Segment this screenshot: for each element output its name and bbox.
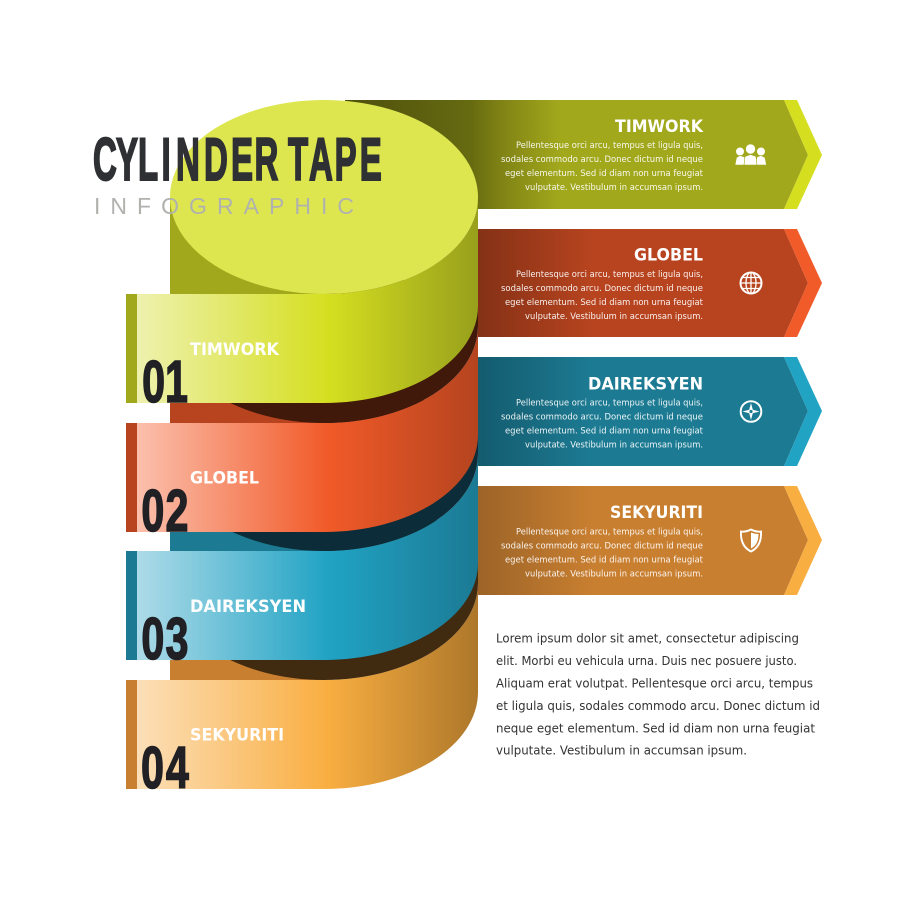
- text block: description: et ligula quis, sodales commodo arcu. Donec dictum id: [496, 699, 820, 713]
- icon: shield: [741, 530, 761, 552]
- panel: arrow 3 daireksyen: eget elementum. Sed id diam non urna feugiat: [505, 427, 704, 437]
- panel: arrow 4 sekyuriti: sodales commodo arcu. Donec dictum id neque: [501, 541, 703, 551]
- text block: description: Lorem ipsum dolor sit amet, consectetur adipiscing: [496, 632, 799, 646]
- panel: arrow 4 sekyuriti: [478, 486, 822, 595]
- band label: globel: GLOBEL: [190, 468, 259, 488]
- shadow under band 1: [170, 280, 478, 423]
- panel: arrow 2 globel: eget elementum. Sed id diam non urna feugiat: [505, 298, 704, 308]
- panel: arrow 3 daireksyen: DAIREKSYEN: [588, 374, 703, 394]
- icon: globe: [740, 272, 762, 294]
- band label: timwork: TIMWORK: [190, 340, 280, 359]
- panel: arrow 2 globel: [478, 229, 822, 337]
- panel: arrow 4 sekyuriti: eget elementum. Sed id diam non urna feugiat: [505, 555, 704, 565]
- panel: arrow 1 timwork: [345, 100, 822, 209]
- panel: cylinder band 4 sekyuriti: [126, 583, 478, 801]
- panel: arrow 3 daireksyen: vulputate. Vestibulum in accumsan ipsum.: [525, 441, 703, 451]
- panel: cylinder band 2 globel: [126, 326, 478, 544]
- text block: description: [496, 632, 820, 758]
- icon: compass: [741, 401, 761, 422]
- panel: arrow 1 timwork: sodales commodo arcu. Donec dictum id neque: [501, 155, 703, 165]
- shadow under band 3: [170, 520, 478, 680]
- text block: description: vulputate. Vestibulum in accumsan ipsum.: [496, 744, 747, 758]
- shadow under band 2: [170, 400, 478, 551]
- icon: people: [735, 144, 766, 165]
- panel: arrow 4 sekyuriti: vulputate. Vestibulum in accumsan ipsum.: [525, 569, 703, 579]
- panel: arrow 1 timwork: eget elementum. Sed id diam non urna feugiat: [505, 169, 704, 179]
- panel: arrow 3 daireksyen: [478, 357, 822, 466]
- number 04: 04: [141, 735, 189, 801]
- panel: arrow 2 globel: Pellentesque orci arcu, tempus et ligula quis,: [516, 270, 703, 280]
- cylinder top ellipse: [170, 100, 478, 294]
- panel: arrow 4 sekyuriti: SEKYURITI: [610, 503, 703, 523]
- text block: description: Aliquam erat volutpat. Pellentesque orci arcu, tempus: [496, 676, 813, 690]
- subtitle: INFOGRAPHIC: [94, 193, 354, 219]
- panel: arrow 1 timwork: vulputate. Vestibulum in accumsan ipsum.: [525, 183, 703, 193]
- panel: arrow 4 sekyuriti: Pellentesque orci arcu, tempus et ligula quis,: [516, 527, 703, 537]
- panel: arrow 2 globel: sodales commodo arcu. Donec dictum id neque: [501, 284, 703, 294]
- text block: description: neque eget elementum. Sed id diam non urna feugiat: [496, 722, 815, 736]
- panel: arrow 1 timwork: Pellentesque orci arcu, tempus et ligula quis,: [516, 141, 703, 151]
- panel: arrow 1 timwork: TIMWORK: [615, 117, 704, 137]
- title: CYLINDER TAPE: [93, 127, 382, 194]
- panel: cylinder band 3 daireksyen: [126, 454, 478, 672]
- number 02: 02: [141, 478, 188, 544]
- text block: description: elit. Morbi eu vehicula urna. Duis nec posuere justo.: [496, 654, 797, 668]
- panel: arrow 3 daireksyen: sodales commodo arcu. Donec dictum id neque: [501, 413, 703, 423]
- band label: daireksyen: DAIREKSYEN: [190, 597, 306, 616]
- panel: arrow 3 daireksyen: Pellentesque orci arcu, tempus et ligula quis,: [516, 399, 703, 409]
- number 01: 01: [142, 349, 188, 415]
- band label: sekyuriti: SEKYURITI: [190, 726, 284, 745]
- panel: arrow 2 globel: GLOBEL: [634, 246, 703, 266]
- panel: cylinder band 1 timwork: [126, 197, 478, 415]
- number 03: 03: [141, 606, 188, 672]
- panel: arrow 2 globel: vulputate. Vestibulum in accumsan ipsum.: [525, 312, 703, 322]
